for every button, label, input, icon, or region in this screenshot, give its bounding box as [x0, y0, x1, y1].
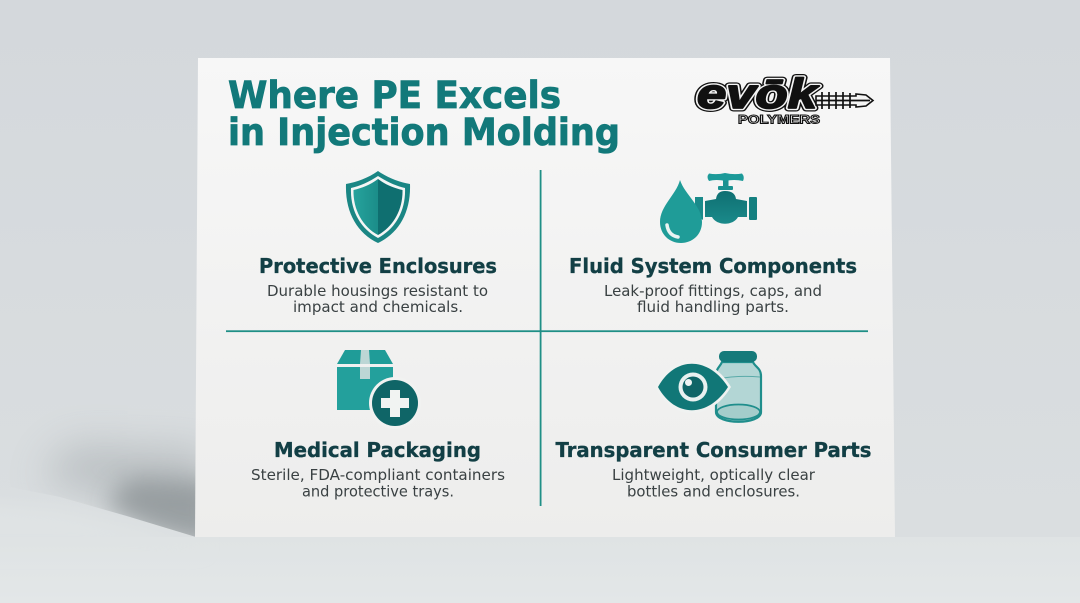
- vertical divider: [540, 170, 542, 506]
- title: [228, 74, 620, 154]
- logo: evok polymers: evōk: [697, 70, 820, 117]
- icon: shield: [346, 171, 410, 243]
- description: fluid handling parts.: [637, 298, 789, 316]
- logo: evok polymers: evōk: [697, 70, 820, 117]
- panel: fluid system components: [569, 173, 857, 316]
- description: [267, 282, 488, 316]
- title: Where PE Excels: [228, 74, 561, 117]
- description: Sterile, FDA-compliant containers: [251, 466, 505, 484]
- description: [251, 466, 505, 500]
- logo: evok polymers: POLYMERS: [738, 114, 820, 126]
- description: bottles and enclosures.: [627, 482, 800, 500]
- background floor: [0, 537, 1080, 603]
- logo: evok polymers: [697, 70, 873, 126]
- heading: Medical Packaging: [274, 438, 481, 462]
- floor blend on left: [0, 500, 200, 548]
- card panel: [195, 58, 895, 537]
- icon: water drop and valve: [660, 173, 757, 243]
- description: and protective trays.: [302, 482, 454, 500]
- heading: Protective Enclosures: [259, 254, 497, 278]
- heading: Transparent Consumer Parts: [556, 438, 872, 462]
- description: [604, 282, 822, 316]
- description: [612, 466, 816, 500]
- panel: transparent consumer parts: [556, 351, 872, 500]
- description: Leak-proof fittings, caps, and: [604, 282, 822, 300]
- card cast shadow: [45, 433, 196, 537]
- icon: eye and jar: [655, 351, 761, 422]
- icon: medical box with plus: [337, 350, 421, 429]
- description: Durable housings resistant to: [267, 282, 488, 300]
- description: Lightweight, optically clear: [612, 466, 816, 484]
- description: impact and chemicals.: [293, 298, 463, 316]
- heading: Fluid System Components: [569, 254, 857, 278]
- logo: evok polymers: evōk: [697, 70, 820, 117]
- horizontal divider: [226, 330, 868, 332]
- panel: medical packaging: [251, 350, 505, 500]
- panel: protective enclosures: [259, 171, 497, 316]
- title: in Injection Molding: [228, 111, 620, 154]
